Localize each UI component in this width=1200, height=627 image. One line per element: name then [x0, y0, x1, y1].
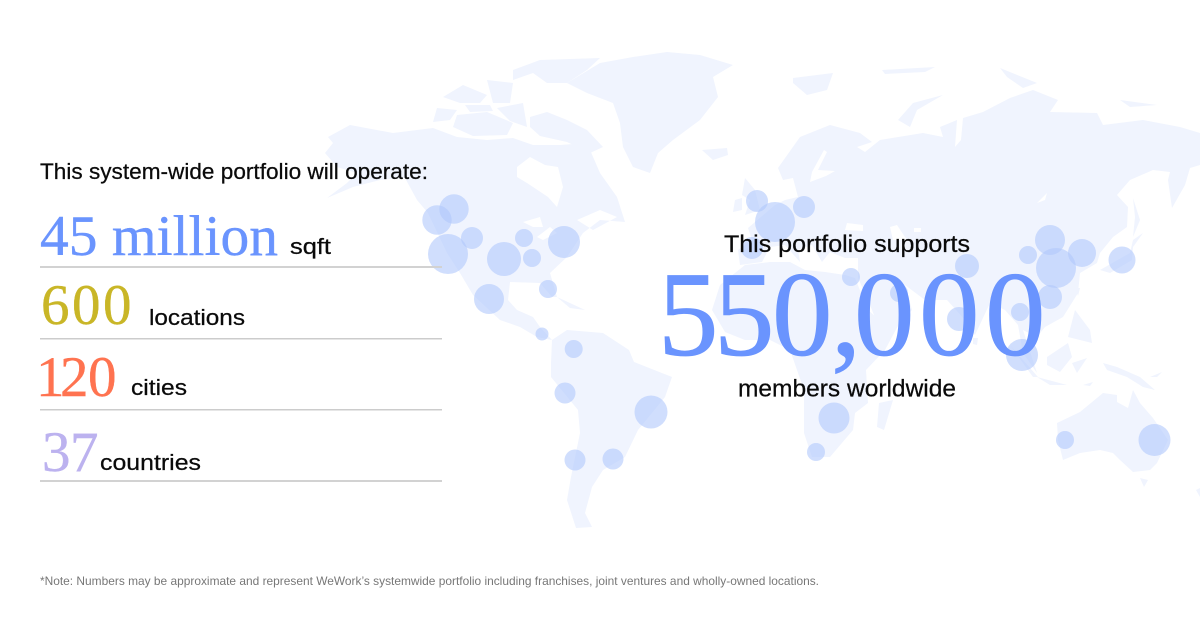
map: Eurasia: [738, 90, 1200, 373]
map: Arctic Eurasia islands: [793, 67, 1157, 127]
footnote: *Note: Numbers may be approximate and represent WeWork’s systemwide portfolio including franchises, joint ventures and wholly-owned locations.: [40, 574, 819, 588]
stat: 120 cities: cities: [131, 375, 187, 400]
map: Arctic Canada islands: [433, 58, 603, 153]
stat: 45 million sqft: sqft: [290, 234, 331, 259]
stat: 120 cities: 120: [36, 346, 116, 409]
big number: 550,000: 550,000: [658, 248, 1046, 382]
stat: 45 million sqft: 45 million: [40, 205, 278, 268]
stat: 37 countries: 37: [42, 421, 98, 484]
map: Southeast Asia islands: [973, 288, 1162, 390]
map: Iceland: [702, 148, 728, 160]
map: Madagascar: [877, 400, 893, 430]
map: Tasmania and New Zealand: [1140, 478, 1200, 497]
map: Greenland: [567, 52, 733, 173]
stat: 600 locations: 600: [41, 274, 132, 337]
map: North America: [325, 125, 625, 340]
stat: 120 cities: [36, 346, 187, 409]
map: South America: [551, 330, 672, 528]
stat: 37 countries: [42, 421, 201, 484]
location bubbles: [422, 190, 1170, 470]
stat: 600 locations: [41, 274, 245, 337]
map: Africa: [712, 262, 900, 457]
text: members worldwide: members worldwide: [738, 376, 956, 402]
stat: 600 locations: locations: [149, 305, 245, 330]
heading: system-wide portfolio: This system-wide portfolio will operate:: [40, 159, 428, 184]
map: Japan and Sakhalin: [1100, 198, 1143, 273]
world map background: [325, 52, 1200, 528]
map: Australia: [1057, 390, 1168, 472]
map: Britain and Ireland: [733, 178, 760, 215]
map: Caribbean: [557, 297, 585, 310]
text: this portfolio supports: This portfolio supports: [724, 231, 970, 258]
stat: 37 countries: countries: [100, 450, 201, 475]
